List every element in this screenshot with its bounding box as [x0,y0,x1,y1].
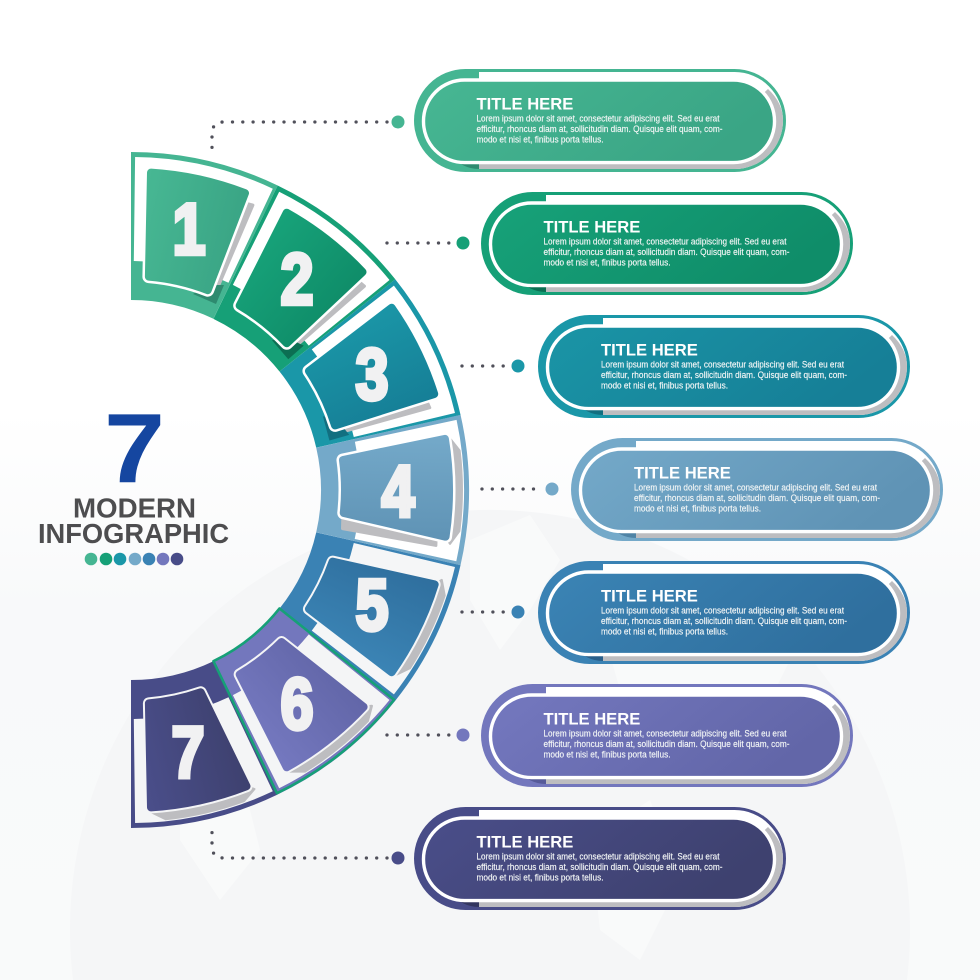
connector 6 [387,728,470,742]
segment 7 [131,661,278,828]
body text: modo et nisi et, finibus porta tellus. [544,750,670,760]
body text [601,360,847,390]
body text: Lorem ipsum dolor sit amet, consectetur adipiscing elit. Sed eu erat [544,236,787,246]
body text [544,728,790,760]
world globe watermark [70,510,910,980]
segment 3 [265,279,487,498]
connector 3 [462,360,524,372]
body text: modo et nisi et, finibus porta tellus. [634,504,761,514]
body text: efficitur, rhoncus diam at, sollicitudin diam. Quisque elit quam, com- [634,493,880,503]
connector 7 [212,830,404,864]
body text [601,606,847,636]
segment 1 [131,152,278,319]
panel: pill 1 [414,69,786,172]
heading: modern: MODERN [73,492,196,524]
body text: efficitur, rhoncus diam at, sollicitudin diam. Quisque elit quam, com- [601,616,847,626]
heading: infographic: INFOGRAPHIC [38,518,229,549]
connector 1 [212,116,404,150]
segment 6 [205,581,410,795]
number 3: 3 [356,333,388,414]
connector 5 [462,606,524,618]
connector 4 [482,482,558,496]
body text: efficitur, rhoncus diam at, sollicitudin diam. Quisque elit quam, com- [544,739,790,749]
segment 4 [298,415,493,595]
heading: TITLE HERE [476,94,573,114]
number 4: 4 [382,450,415,531]
body text [544,236,790,268]
big number seven: 7 [104,394,165,504]
heading: TITLE HERE [634,464,731,482]
body text: Lorem ipsum dolor sit amet, consectetur adipiscing elit. Sed eu erat [476,114,720,124]
body text: modo et nisi et, finibus porta tellus. [544,258,670,268]
body text [476,114,723,144]
heading: TITLE HERE [601,586,698,606]
body text: efficitur, rhoncus diam at, sollicitudin diam. Quisque elit quam, com- [544,247,790,257]
body text: efficitur, rhoncus diam at, sollicitudin diam. Quisque elit quam, com- [476,862,723,872]
heading: TITLE HERE [544,710,640,728]
body text [476,852,723,882]
body text: Lorem ipsum dolor sit amet, consectetur adipiscing elit. Sed eu erat [634,482,878,492]
body text: modo et nisi et, finibus porta tellus. [601,380,728,390]
panel: pill 7 [414,807,786,910]
number 7: 7 [172,711,204,792]
heading: TITLE HERE [601,340,698,360]
heading: TITLE HERE [544,218,640,236]
number 2: 2 [281,238,313,319]
body text [634,482,880,514]
panel: pill 6 [481,684,853,787]
body text: modo et nisi et, finibus porta tellus. [476,134,604,144]
body text: modo et nisi et, finibus porta tellus. [601,626,728,636]
panel: pill 2 [481,192,853,295]
panel: pill 3 [538,315,910,418]
colour dots legend [85,553,183,565]
body text: efficitur, rhoncus diam at, sollicitudin diam. Quisque elit quam, com- [476,124,723,134]
body text: efficitur, rhoncus diam at, sollicitudin diam. Quisque elit quam, com- [601,370,847,380]
body text: Lorem ipsum dolor sit amet, consectetur adipiscing elit. Sed eu erat [601,360,845,370]
body text: Lorem ipsum dolor sit amet, consectetur adipiscing elit. Sed eu erat [544,728,787,738]
body text: modo et nisi et, finibus porta tellus. [476,872,604,882]
number 5: 5 [356,564,388,645]
heading: TITLE HERE [476,832,573,852]
panel: pill 4 [571,438,943,541]
number 1: 1 [173,188,205,269]
body text: Lorem ipsum dolor sit amet, consectetur adipiscing elit. Sed eu erat [476,852,720,862]
segment 2 [205,185,410,399]
segment 5 [265,482,487,701]
body text: Lorem ipsum dolor sit amet, consectetur adipiscing elit. Sed eu erat [601,606,845,616]
number 6: 6 [281,663,313,744]
panel: pill 5 [538,561,910,664]
connector 2 [387,236,470,250]
